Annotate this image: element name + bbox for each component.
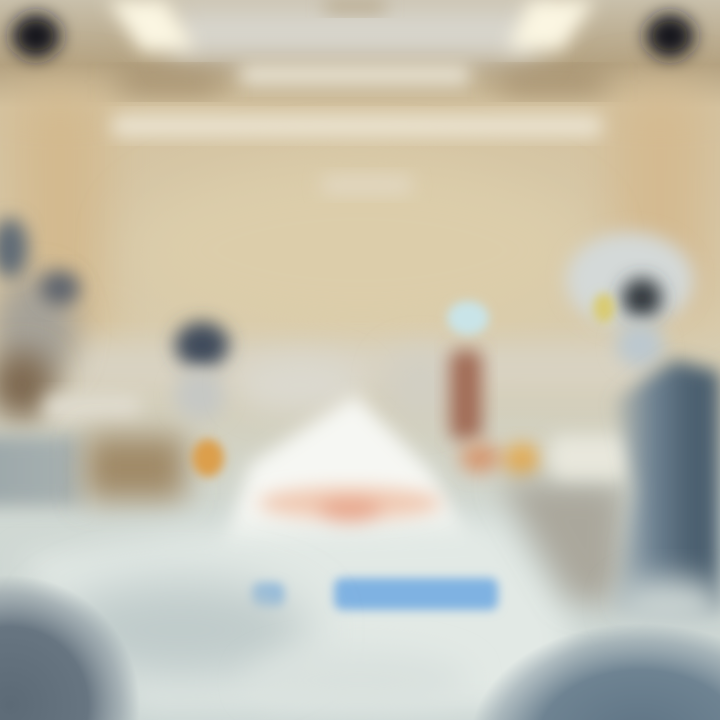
text block: blurred small label on wall	[322, 176, 412, 194]
panel: ceiling	[120, 0, 605, 92]
title: blurred heading on wall	[240, 64, 470, 86]
icon: ceiling light right	[508, 0, 595, 50]
icon: dark speaker left	[12, 14, 60, 58]
panel: patient body pink area	[258, 487, 442, 522]
panel: gloved hands	[460, 443, 540, 477]
panel: floor at right of bed	[500, 480, 625, 605]
text block: blurred blue label on sheet	[252, 578, 498, 610]
panel: patient bed with white sheet	[20, 349, 575, 710]
panel: left surgical staff figure	[174, 322, 229, 477]
panel: right surgeon figure	[550, 232, 720, 610]
panel: left equipment cluster	[0, 218, 185, 506]
icon: center bottle with light cap	[447, 301, 489, 440]
icon: dark speaker right	[646, 14, 694, 58]
icon: ceiling light left	[108, 0, 195, 52]
text block: blurred subtitle on wall	[112, 116, 602, 136]
